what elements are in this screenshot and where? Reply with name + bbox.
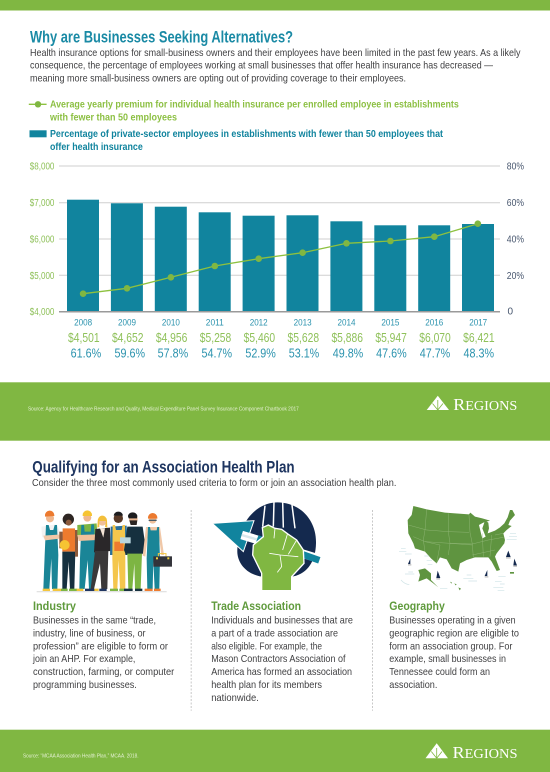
year labels: 2017: [469, 318, 487, 329]
column: geography: example, small businesses in: [389, 653, 506, 665]
chart: [30, 162, 524, 361]
waves: [399, 533, 517, 591]
legend: percentage bar: [30, 129, 444, 153]
left axis labels: $4,000: [30, 307, 55, 318]
column: geography: Tennessee could form an: [389, 666, 490, 678]
right axis labels: 60%: [507, 198, 524, 209]
column: geography: [389, 599, 519, 691]
icon: fist holding trowel: [212, 502, 320, 591]
premium values: $5,258: [200, 331, 231, 345]
premium values: $4,652: [112, 331, 143, 345]
column: trade association: a part of a trade association are: [211, 627, 338, 639]
fist: [253, 525, 304, 591]
year labels: 2016: [425, 318, 443, 329]
left axis labels: $5,000: [30, 271, 55, 282]
worker 6: [120, 512, 146, 591]
column: industry: programming businesses.: [33, 679, 137, 691]
column: geography: Businesses operating in a given: [389, 614, 516, 626]
year labels: 2010: [162, 318, 180, 329]
column: industry: industry, line of business, or: [33, 627, 146, 639]
contiguous us: [408, 506, 515, 572]
intro text: [30, 47, 521, 84]
percentage values: 48.3%: [464, 347, 494, 361]
left axis labels: $8,000: [30, 162, 55, 172]
right axis labels: 40%: [507, 234, 524, 246]
column: industry: Industry: [33, 599, 76, 613]
green source band: [0, 382, 550, 441]
divider right: [372, 510, 374, 711]
legend: percentage bar: Percentage of private-sector employees in establishments with fewer than 50 employees that: [50, 129, 444, 140]
legend: percentage bar: offer health insurance: [50, 142, 143, 153]
top green bar: [0, 0, 550, 10]
percentage values: 61.6%: [71, 347, 101, 361]
year labels: 2008: [74, 318, 92, 329]
year labels: 2011: [206, 318, 224, 329]
percentage values: 53.1%: [289, 347, 319, 361]
section subtitle: Consider the three most commonly used criteria to form or join an association health plan.: [32, 477, 396, 489]
worker 3: [77, 510, 99, 591]
year labels: 2013: [294, 318, 312, 329]
column: trade association: Trade Association: [211, 599, 301, 613]
percentage values: [71, 347, 494, 361]
column: geography: association.: [389, 679, 437, 691]
worker 1: [41, 511, 63, 591]
premium values: [68, 331, 495, 345]
column: industry: Businesses in the same “trade,: [33, 614, 156, 626]
premium values: $5,460: [244, 331, 275, 345]
year labels: [74, 318, 487, 329]
hawaii: [450, 582, 461, 590]
hard hat: [237, 502, 316, 576]
worker 2: [59, 514, 78, 591]
chart baseline: [59, 311, 500, 312]
right axis labels: 80%: [507, 162, 524, 172]
percentage values: 49.8%: [333, 347, 363, 361]
column: trade association: nationwide.: [211, 692, 259, 704]
column: trade association: health plan for its members: [211, 679, 322, 691]
premium values: $5,947: [375, 331, 407, 345]
premium values: $4,956: [156, 331, 187, 345]
footer source text: Source: “MCAA Association Health Plan,” MCAA. 2018.: [23, 753, 139, 759]
column: trade association: also eligible. For example, the: [211, 640, 322, 652]
regions logo: [427, 395, 517, 414]
year labels: 2012: [250, 318, 268, 329]
divider left: [190, 510, 192, 711]
column: trade association: America has formed an association: [211, 666, 352, 678]
footer regions logo: [426, 743, 518, 762]
left axis labels: $6,000: [30, 234, 55, 246]
title: why businesses seek alternatives: Why are Businesses Seeking Alternatives?: [30, 29, 293, 47]
intro text: meaning more small-business owners are opting out of providing coverage to their employees.: [30, 72, 406, 84]
premium values: $5,886: [331, 331, 363, 345]
percentage values: 47.7%: [420, 347, 450, 361]
right axis labels: 20%: [507, 271, 524, 282]
premium line: [80, 220, 481, 297]
legend: premium line: [29, 100, 459, 123]
puerto rico: [510, 572, 514, 574]
right axis labels: 0: [508, 306, 514, 318]
column: industry: [32, 599, 175, 691]
right axis labels: [507, 162, 524, 318]
worker 4: [85, 516, 111, 591]
green footer band: [0, 730, 550, 772]
bars: [67, 200, 494, 312]
column: industry: profession” are eligible to form or: [33, 640, 168, 652]
section title: qualifying: Qualifying for an Association Health Plan: [32, 459, 295, 477]
boats: [408, 551, 517, 579]
left axis labels: $7,000: [30, 198, 55, 209]
legend: premium line: Average yearly premium for individual health insurance per enrolled employee in establishments: [50, 100, 459, 111]
column: geography: geographic region are eligible to: [389, 627, 519, 639]
column: geography: Geography: [389, 599, 445, 613]
percentage values: 57.8%: [158, 347, 188, 361]
source text: Source: Agency for Healthcare Research and Quality, Medical Expenditure Panel Survey Insurance Component Chartbook 2017: [28, 406, 299, 412]
trowel: [212, 521, 320, 560]
footer regions logo: REGIONS: [452, 743, 518, 762]
chart gridlines: [59, 166, 500, 275]
percentage values: 52.9%: [245, 347, 276, 361]
ground: [37, 591, 167, 592]
worker 5: [110, 512, 128, 591]
icon: workers: [37, 510, 172, 592]
column: trade association: [211, 599, 353, 704]
alaska: [418, 568, 438, 587]
column: industry: construction, farming, or computer: [33, 666, 175, 678]
column: trade association: Mason Contractors Association of: [211, 653, 346, 665]
toolbox: [153, 554, 172, 567]
column: trade association: Individuals and businesses that are: [211, 614, 353, 626]
fist creases: [269, 528, 298, 572]
year labels: 2015: [381, 318, 399, 329]
worker 7: [143, 513, 164, 591]
percentage values: 47.6%: [376, 347, 407, 361]
regions logo: REGIONS: [453, 395, 517, 414]
year labels: 2014: [338, 318, 356, 329]
column: geography: form an association group. For: [389, 640, 513, 652]
left axis labels: [30, 162, 55, 318]
icon: us map: [399, 506, 517, 591]
premium values: $6,070: [419, 331, 451, 345]
premium values: $5,628: [288, 331, 319, 345]
premium values: $4,501: [68, 331, 100, 345]
state lines: [408, 509, 503, 563]
premium values: $6,421: [463, 331, 495, 345]
percentage values: 54.7%: [202, 347, 232, 361]
column: industry: join an AHP. For example,: [32, 653, 135, 665]
year labels: 2009: [118, 318, 136, 329]
percentage values: 59.6%: [115, 347, 145, 361]
legend: premium line: with fewer than 50 employees: [49, 112, 177, 123]
